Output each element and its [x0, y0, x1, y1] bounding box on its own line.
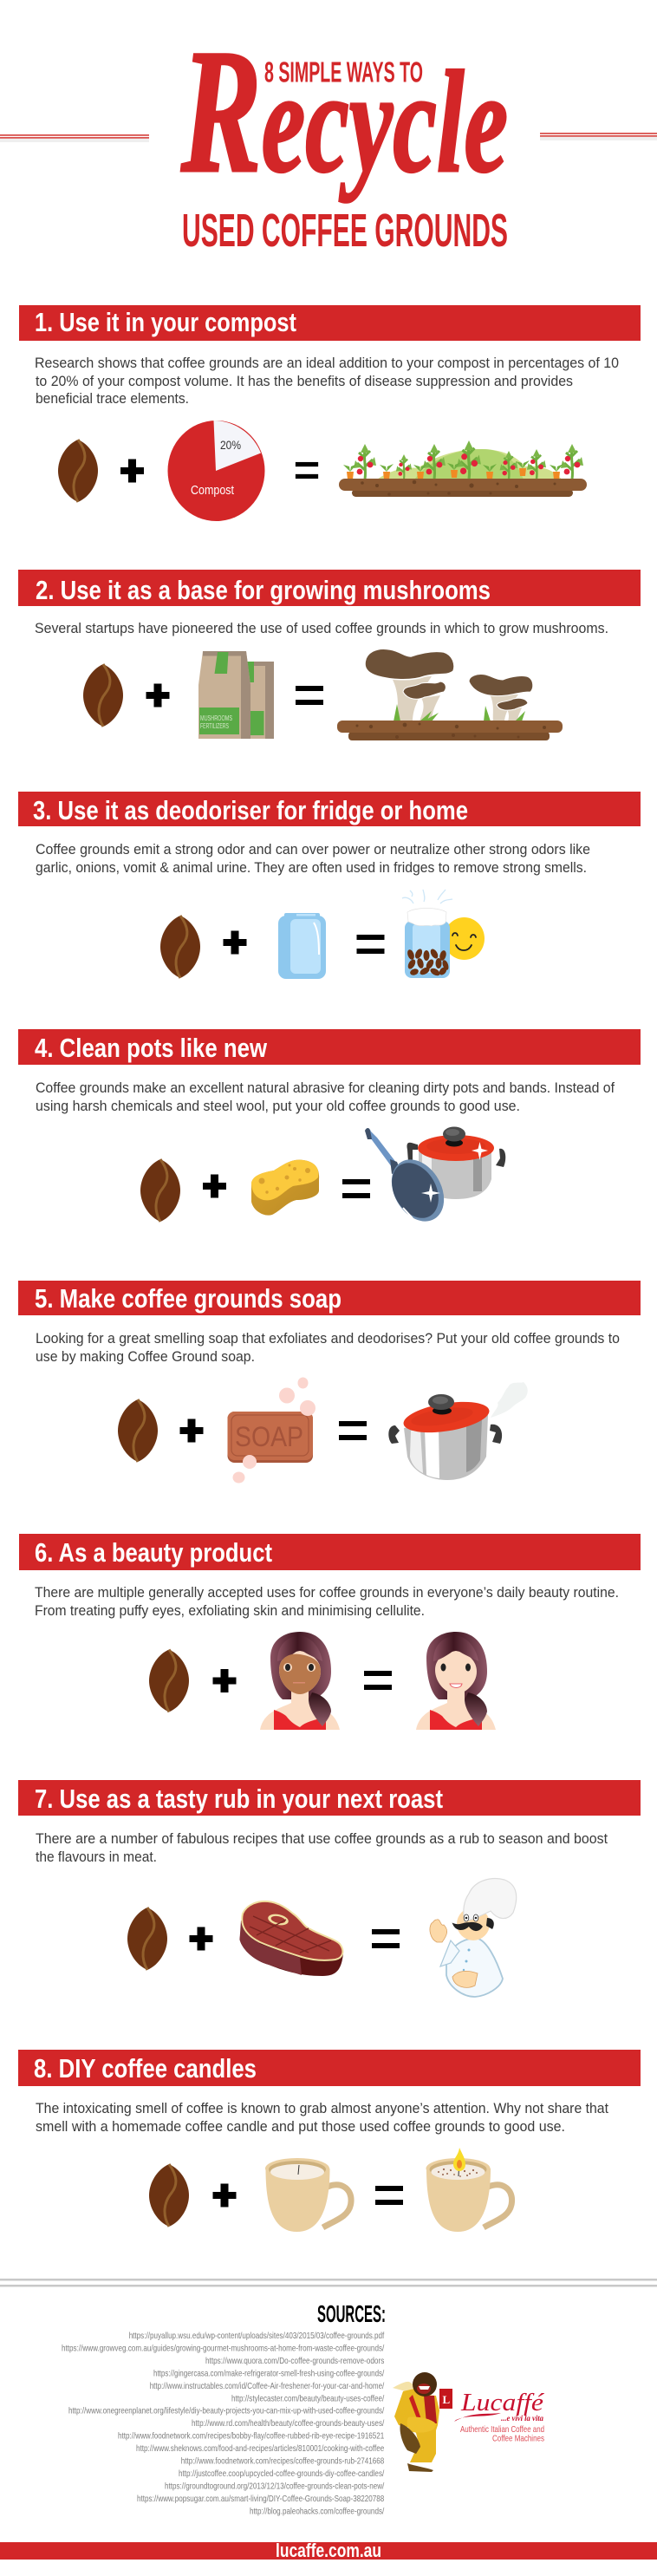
- icon: coffee bean: [58, 440, 98, 502]
- panel: 8 candles: [18, 2050, 641, 2232]
- icon: coffee bean: [118, 1399, 158, 1462]
- icon: steak: [239, 1901, 343, 1976]
- icon: equals: [375, 2186, 403, 2205]
- icon: coffee bean: [149, 2164, 189, 2227]
- icon: plus: [180, 1418, 203, 1443]
- heading bar 5: [18, 1281, 641, 1315]
- body text 4: using harsh chemicals and steel wool, put your old coffee grounds to good use.: [36, 1098, 520, 1114]
- title rule left: [0, 134, 149, 142]
- heading bar 4: [18, 1029, 641, 1065]
- pie chart: 20% coffee, compost: 20%: [220, 438, 241, 452]
- body text 4: [36, 1079, 615, 1114]
- footer bar: lucaffe.com.au: [276, 2540, 381, 2561]
- icon: equals: [342, 1179, 370, 1198]
- illustration: pot with steam: [388, 1382, 528, 1480]
- icon: plus: [189, 1927, 213, 1951]
- panel: 3 deodoriser: [18, 792, 641, 979]
- title rule right: [540, 133, 657, 140]
- icon: equals: [364, 1671, 392, 1690]
- source list: http://www.foodnetwork.com/recipes/bobby-flay/coffee-rubbed-rib-eye-recipe-1916521: [118, 2431, 384, 2442]
- pie chart: 20% coffee, compost: [168, 421, 265, 521]
- source list: http://www.sheknows.com/food-and-recipes/articles/810001/cooking-with-coffee: [136, 2443, 384, 2454]
- illustration: fertilizer bags: FERTILIZERS: [200, 722, 229, 730]
- body text 1: [35, 355, 619, 407]
- logo: Lucaffe: [454, 2389, 544, 2443]
- panel: 6 beauty: [19, 1534, 641, 1730]
- icon: mug with plain candle: [265, 2158, 351, 2232]
- title: Recycle: Recycle: [180, 13, 508, 210]
- panel: 2 mushrooms: [18, 570, 641, 740]
- mascot: Lucaffe man with mug: L: [442, 2393, 451, 2406]
- icon: coffee bean: [83, 664, 123, 727]
- icon: equals: [357, 935, 385, 954]
- illustration: woman with clear skin: [416, 1632, 496, 1730]
- icon: coffee bean: [140, 1159, 180, 1222]
- panel: 7 rub: [18, 1780, 641, 1997]
- icon: mug with coffee candle: [426, 2148, 512, 2232]
- body text 6: There are multiple generally accepted uses for coffee grounds in everyone’s daily beauty routine.: [35, 1584, 619, 1601]
- body text 1: Research shows that coffee grounds are an ideal addition to your compost in percentages of 10: [35, 355, 619, 371]
- heading bar 7: 7. Use as a tasty rub in your next roast: [35, 1784, 443, 1814]
- source list: http://blog.paleohacks.com/coffee-grounds/: [250, 2506, 384, 2516]
- heading bar 6: [19, 1534, 641, 1570]
- icon: plus: [213, 2183, 236, 2208]
- footer bar: [0, 2540, 657, 2561]
- source list: http://stylecaster.com/beauty/beauty-uses-coffee/: [231, 2393, 384, 2403]
- source list: https://www.growveg.com.au/guides/growing-gourmet-mushrooms-at-home-from-waste-coffee-grounds/: [62, 2343, 384, 2353]
- heading bar 6: 6. As a beauty product: [35, 1537, 272, 1568]
- heading bar 5: 5. Make coffee grounds soap: [35, 1283, 342, 1314]
- panel: 4 clean pots: [18, 1029, 641, 1230]
- source list: https://groundtoground.org/2013/12/13/coffee-grounds-clean-pots-new/: [165, 2481, 384, 2492]
- icon: soap bar with bubbles: SOAP: [235, 1421, 303, 1452]
- illustration: fertilizer bags: MUSHROOMS: [200, 714, 232, 722]
- pie chart: 20% coffee, compost: Compost: [191, 483, 235, 498]
- illustration: shiny pan and pot: [365, 1127, 505, 1230]
- body text 3: [36, 841, 590, 876]
- panel: 1 compost: [19, 305, 641, 521]
- body text 1: beneficial trace elements.: [36, 390, 189, 407]
- icon: plus: [213, 1669, 236, 1692]
- illustration: woman with coffee face mask: [260, 1632, 340, 1730]
- illustration: fertilizer bags: [198, 651, 274, 739]
- icon: coffee bean: [127, 1908, 167, 1970]
- icon: sponge: [251, 1160, 319, 1216]
- source list: http://www.onegreenplanet.org/lifestyle/diy-beauty-projects-you-can-mix-up-with-used-coffee-grounds/: [68, 2405, 384, 2416]
- heading bar 8: [18, 2050, 641, 2086]
- heading bar 3: 3. Use it as deodoriser for fridge or home: [33, 795, 468, 825]
- body text 8: The intoxicating smell of coffee is known to grab almost anyone’s attention. Why not share that: [36, 2100, 608, 2116]
- body text 8: [36, 2100, 608, 2135]
- body text 8: smell with a homemade coffee candle and put those used coffee grounds to good use.: [36, 2118, 565, 2135]
- heading bar 7: [18, 1780, 641, 1816]
- icon: plus: [203, 1174, 226, 1198]
- body text 6: [35, 1584, 619, 1619]
- panel: 5 soap: [18, 1281, 641, 1483]
- icon: empty jar: [278, 913, 326, 979]
- icon: plus: [224, 931, 246, 954]
- source list: http://www.rd.com/health/beauty/coffee-grounds-beauty-uses/: [192, 2418, 384, 2429]
- double rule: [0, 2279, 657, 2287]
- heading bar 1: 1. Use it in your compost: [35, 307, 296, 337]
- icon: soap bar with bubbles: [227, 1377, 315, 1483]
- body text 7: [36, 1830, 608, 1865]
- icon: equals: [339, 1421, 367, 1440]
- body text 5: [36, 1330, 620, 1365]
- icon: coffee bean: [160, 916, 200, 978]
- body text 3: Coffee grounds emit a strong odor and can over power or neutralize other strong odors like: [36, 841, 590, 858]
- title block: [0, 13, 657, 257]
- sources footer: [0, 2279, 657, 2561]
- title: 8 simple ways to: 8 SIMPLE WAYS TO: [264, 55, 423, 88]
- body text 7: There are a number of fabulous recipes that use coffee grounds as a rub to season and boost: [36, 1830, 608, 1847]
- source list: https://www.quora.com/Do-coffee-grounds-remove-odors: [205, 2356, 384, 2366]
- source list: https://gingercasa.com/make-refrigerator-smell-fresh-using-coffee-grounds/: [153, 2369, 384, 2379]
- illustration: chef: [430, 1879, 517, 1997]
- icon: equals: [296, 462, 318, 479]
- body text 4: Coffee grounds make an excellent natural abrasive for cleaning dirty pots and bands. Instead of: [36, 1079, 615, 1096]
- body text 5: use by making Coffee Ground soap.: [36, 1348, 255, 1365]
- heading bar 8: 8. DIY coffee candles: [34, 2053, 257, 2084]
- icon: plus: [146, 683, 170, 708]
- illustration: mushrooms on soil: [337, 649, 563, 740]
- icon: equals: [296, 686, 323, 705]
- body text 2: Several startups have pioneered the use of used coffee grounds in which to grow mushrooms.: [35, 620, 608, 636]
- source list: http://www.foodnetwork.com/recipes/coffee-grounds-rub-2741668: [181, 2455, 384, 2466]
- logo: Lucaffe: Lucaffé: [460, 2389, 544, 2416]
- heading bar 4: 4. Clean pots like new: [35, 1033, 268, 1063]
- illustration: vegetable garden: [339, 440, 587, 497]
- heading bar 1: [19, 305, 641, 341]
- logo: Lucaffe: Coffee Machines: [492, 2433, 544, 2443]
- mascot: Lucaffe man with mug: [393, 2372, 452, 2472]
- source list: http://www.instructables.com/id/Coffee-Air-freshener-for-your-car-and-home/: [150, 2381, 384, 2391]
- source list: https://www.popsugar.com.au/smart-living/DIY-Coffee-Grounds-Soap-38220788: [137, 2494, 384, 2504]
- icon: equals: [372, 1929, 400, 1948]
- logo: Lucaffe: Authentic Italian Coffee and: [460, 2424, 544, 2435]
- icon: plus: [120, 460, 144, 482]
- logo: Lucaffe: ...e vivi la vita: [501, 2414, 543, 2423]
- body text 5: Looking for a great smelling soap that exfoliates and deodorises? Put your old coffee grounds to: [36, 1330, 620, 1347]
- source list: [62, 2331, 384, 2516]
- body text 7: the flavours in meat.: [36, 1849, 157, 1865]
- illustration: jar of coffee with smiley: [402, 890, 485, 978]
- source list: https://puyallup.wsu.edu/wp-content/uploads/sites/403/2015/03/coffee-grounds.pdf: [129, 2331, 384, 2341]
- body text 6: From treating puffy eyes, exfoliating skin and minimising cellulite.: [35, 1602, 425, 1619]
- source list: http://justcoffee.coop/upcycled-coffee-grounds-diy-coffee-candles/: [179, 2468, 384, 2479]
- heading bar 2: 2. Use it as a base for growing mushrooms: [36, 575, 491, 605]
- body text 3: garlic, onions, vomit & animal urine. They are often used in fridges to remove strong smells.: [36, 859, 587, 876]
- icon: coffee bean: [149, 1649, 189, 1712]
- body text 1: to 20% of your compost volume. It has the benefits of disease suppression and provides: [36, 373, 573, 389]
- heading: sources: SOURCES:: [317, 2300, 386, 2327]
